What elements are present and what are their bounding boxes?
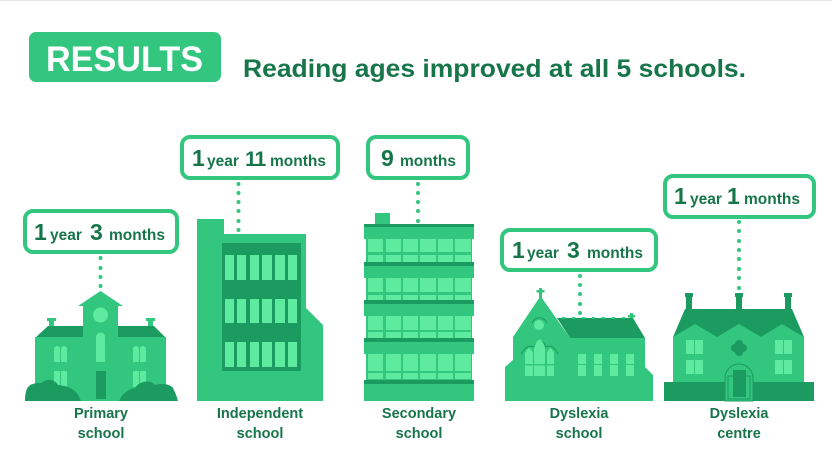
callout: 1 year 11 months: 1 [245,148,257,171]
icon: secondary school building [364,213,474,401]
heading badge: RESULTS [29,32,221,82]
callout: 1 year 3 months: 1 [34,219,47,245]
dotted connector [416,182,420,223]
label: Dyslexia [710,406,769,422]
school column: secondary school [364,137,474,442]
school column: primary school: school [78,426,124,442]
school column: dyslexia centre: centre [717,426,761,442]
callout: 1 year 1 months: months [744,191,800,208]
school column: secondary school: school [396,426,442,442]
callout: 1 year 11 months: months [270,153,326,170]
callout: 1 year 3 months: 3 [567,237,580,263]
school column: primary school [25,211,178,442]
dotted connector [98,256,102,288]
callout: 1 year 1 months: 1 [674,183,687,209]
school column: independent school: school [237,426,283,442]
callout: 1 year 11 months [182,137,338,178]
school column: dyslexia centre [664,176,814,442]
callout: 1 year 1 months: year [690,191,722,208]
callout: 1 year 1 months: 1 [727,183,740,209]
callout: 1 year 3 months: months [587,245,643,262]
callout: 1 year 3 months [25,211,177,252]
callout: 1 year 3 months: 1 [512,237,525,263]
icon: dyslexia centre building [664,293,814,401]
label: Primary [74,406,128,422]
label: Secondary [382,406,456,422]
callout: 1 year 3 months: year [50,227,82,244]
callout: 1 year 11 months: 1 [192,145,205,171]
callout: 1 year 3 months: year [527,245,559,262]
school column: dyslexia school: school [556,426,602,442]
heading badge: RESULTS: RESULTS [46,40,203,79]
callout: 1 year 3 months [502,230,656,270]
callout: 1 year 11 months: year [207,153,239,170]
icon: dyslexia school building [505,288,653,401]
dotted connector [737,220,741,290]
school column: dyslexia school [502,230,656,442]
subtitle: Reading ages improved at all 5 schools. [243,55,746,83]
icon: independent school building [197,219,323,401]
dotted connector [578,274,582,315]
dotted connector [236,182,240,232]
callout: 1 year 3 months: 3 [90,219,103,245]
callout: 1 year 1 months [665,176,814,217]
callout: 9 months: months [400,153,456,170]
icon: primary school building [25,291,178,401]
callout: 1 year 11 months: 1 [254,148,266,171]
label: Independent [217,406,303,422]
callout: 1 year 3 months: months [109,227,165,244]
school column: independent school [182,137,338,442]
callout: 9 months: 9 [381,145,394,171]
label: Dyslexia [550,406,609,422]
callout: 9 months [368,137,468,178]
